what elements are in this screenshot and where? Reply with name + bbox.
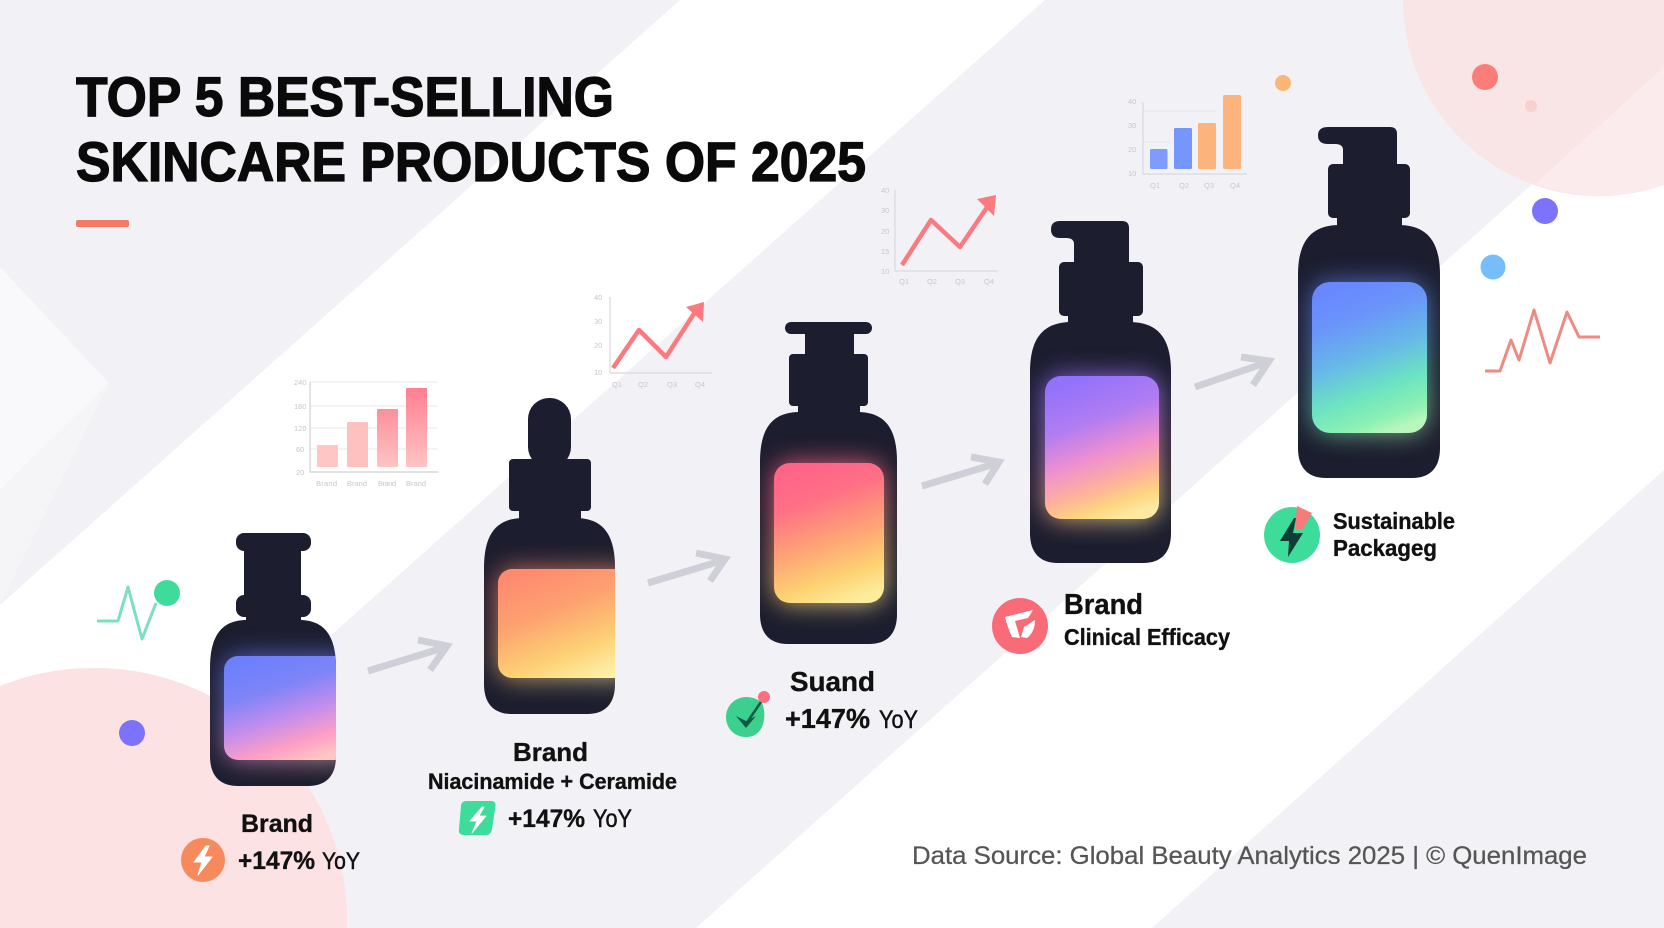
- chart: blue and orange bar chart: [1128, 95, 1247, 190]
- chart: pink bar chart: Brand: [378, 479, 396, 488]
- chart: pink line chart upper: Q4: [984, 277, 994, 286]
- arrow 2: [648, 553, 725, 583]
- product 4 text: [1064, 589, 1230, 650]
- title: SKINCARE PRODUCTS OF 2025: [76, 130, 866, 193]
- chart: pink line chart: Q4: [695, 380, 705, 389]
- chart: blue and orange bar chart: Q2: [1179, 181, 1189, 190]
- chart: blue and orange bar chart: Q4: [1230, 181, 1240, 190]
- product 2 bottle: [484, 398, 615, 714]
- title: TOP 5 BEST-SELLING: [76, 65, 614, 128]
- product 1 text: Brand: [241, 810, 313, 838]
- chart: pink line chart: Q3: [667, 380, 677, 389]
- chart: blue and orange bar chart: 20: [1128, 145, 1136, 154]
- chart: blue and orange bar chart: 30: [1128, 121, 1136, 130]
- chart: pink line chart upper: 10: [881, 267, 889, 276]
- chart: pink line chart upper: 15: [881, 247, 889, 256]
- arrow 4: [1195, 357, 1269, 387]
- chart: blue and orange bar chart: Q3: [1204, 181, 1214, 190]
- chart: blue and orange bar chart: Q1: [1150, 181, 1160, 190]
- chart: pink line chart upper: 30: [881, 206, 889, 215]
- arrow 3: [922, 457, 999, 486]
- chart: pink line chart upper: Q1: [899, 277, 909, 286]
- icon: green pulse line with dot: [97, 580, 180, 639]
- icon: green bolt tile: [459, 801, 496, 835]
- chart: pink line chart upper: Q3: [955, 277, 965, 286]
- chart: pink line chart upper: Q2: [927, 277, 937, 286]
- icon: red pulse line: [1485, 310, 1600, 371]
- product 3 text: Suand: [790, 666, 875, 697]
- icon: orange bolt badge: [181, 838, 225, 882]
- icon: coral badge: [992, 598, 1048, 654]
- chart: pink bar chart: 120: [294, 424, 307, 433]
- product 1 text: +147%: [238, 847, 315, 875]
- decorative dots: [119, 64, 1558, 746]
- product 2 text: YoY: [593, 805, 632, 833]
- product 4 bottle: [1030, 221, 1171, 563]
- chart: pink bar chart: 60: [296, 445, 304, 454]
- chart: pink bar chart: 240: [294, 378, 307, 387]
- chart: pink line chart upper: 20: [881, 227, 889, 236]
- chart: pink line chart: 30: [594, 317, 602, 326]
- chart: pink bar chart: Brand: [406, 479, 426, 488]
- product 5 text: [1333, 508, 1455, 561]
- product 4 text: Brand: [1064, 589, 1143, 621]
- product 2 text: +147%: [508, 805, 585, 833]
- chart: blue and orange bar chart: 10: [1128, 169, 1136, 178]
- chart: pink line chart: Q1: [612, 380, 622, 389]
- icon: green bolt badge with red wedge: [1264, 506, 1320, 563]
- product 5 bottle: [1298, 127, 1440, 478]
- footer data source: Data Source: Global Beauty Analytics 2025 | © QuenImage: [912, 842, 1587, 870]
- product 4 text: Clinical Efficacy: [1064, 624, 1230, 650]
- chart: pink line chart upper: 40: [881, 186, 889, 195]
- chart: pink bar chart: Brand: [316, 479, 337, 488]
- product 3 text: YoY: [879, 706, 918, 734]
- product 1 text: YoY: [322, 848, 360, 875]
- product 5 text: Sustainable: [1333, 508, 1455, 534]
- chart: pink bar chart: 180: [294, 402, 307, 411]
- title: [76, 65, 866, 193]
- chart: pink bar chart: 20: [296, 468, 304, 477]
- chart: pink bar chart: Brand: [347, 479, 367, 488]
- chart: pink line chart: 20: [594, 341, 602, 350]
- product 1 bottle: [210, 533, 336, 786]
- chart: pink line chart: Q2: [638, 380, 648, 389]
- product 5 text: Packageg: [1333, 535, 1437, 561]
- chart: pink bar chart: [294, 378, 438, 488]
- product 2 text: [428, 737, 677, 833]
- chart: pink line chart upper: [881, 186, 998, 286]
- chart: pink line chart: 10: [594, 368, 602, 377]
- product 2 text: Brand: [513, 737, 588, 767]
- chart: blue and orange bar chart: 40: [1128, 97, 1136, 106]
- product 3 bottle: [760, 322, 897, 644]
- product 3 text: +147%: [785, 703, 870, 734]
- product 2 text: Niacinamide + Ceramide: [428, 769, 677, 794]
- product 1 text: [238, 810, 360, 875]
- chart: pink line chart: [594, 293, 712, 389]
- arrow 1: [368, 640, 447, 671]
- icon: green check badge with red dot: [726, 691, 770, 737]
- chart: pink line chart: 40: [594, 293, 602, 302]
- title accent underline: [76, 220, 129, 227]
- product 3 text: [785, 666, 918, 734]
